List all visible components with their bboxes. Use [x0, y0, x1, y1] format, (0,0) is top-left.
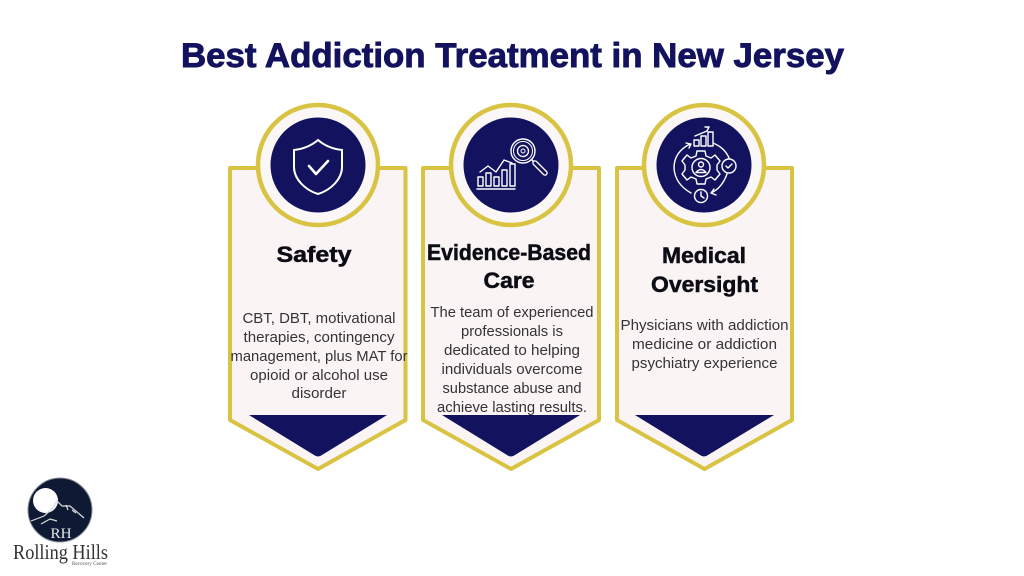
card outline [617, 168, 792, 469]
heading: safety: Safety [276, 242, 352, 267]
heading: evidence-based care [427, 240, 591, 293]
heading: medical oversight: Oversight [651, 272, 759, 297]
arrow: down chevron [249, 415, 387, 456]
heading: evidence-based care: Evidence-Based [427, 240, 591, 265]
title: Best Addiction Treatment in New Jersey [181, 37, 844, 75]
description: evidence-based care: dedicated to helping [444, 343, 580, 359]
card outline [230, 168, 406, 469]
description: evidence-based care: The team of experienced [430, 305, 594, 321]
icon: gear with person, chart and clock [674, 127, 736, 202]
panel: evidence-based care [423, 105, 599, 469]
description: evidence-based care: achieve lasting results. [437, 400, 587, 416]
icon: shield with check [294, 140, 342, 194]
description: medical oversight: psychiatry experience [632, 356, 778, 372]
icon: chart with magnifier and gear [477, 139, 545, 189]
heading: medical oversight: Medical [662, 243, 746, 268]
description: evidence-based care: substance abuse and [442, 381, 582, 397]
description: safety: disorder [292, 386, 347, 402]
logo tagline: Recovery Center [72, 562, 107, 567]
description: medical oversight [620, 318, 788, 372]
description: medical oversight: Physicians with addiction [620, 318, 788, 334]
description: safety: CBT, DBT, motivational [242, 311, 396, 327]
heading: evidence-based care: Care [484, 268, 534, 293]
description: safety: management, plus MAT for [230, 349, 408, 365]
arrow: down chevron [635, 415, 774, 456]
description: evidence-based care: individuals overcome [442, 362, 582, 378]
description: safety: opioid or alcohol use [250, 368, 388, 384]
panel: safety [230, 105, 408, 469]
logo: rolling hills [13, 478, 108, 567]
icon circle [258, 105, 378, 225]
description: safety [230, 311, 408, 402]
arrow: down chevron [442, 415, 580, 456]
description: evidence-based care [430, 305, 594, 416]
logo monogram: RH [50, 526, 72, 542]
description: medical oversight: medicine or addiction [632, 337, 777, 353]
panel: medical oversight [617, 105, 792, 469]
description: safety: therapies, contingency [244, 330, 395, 346]
logo wordmark: Rolling Hills [13, 540, 108, 564]
heading: medical oversight [651, 243, 759, 297]
icon circle [644, 105, 764, 225]
card outline [423, 168, 599, 469]
icon circle [451, 105, 571, 225]
logo badge [28, 478, 92, 542]
description: evidence-based care: professionals is [461, 324, 563, 340]
